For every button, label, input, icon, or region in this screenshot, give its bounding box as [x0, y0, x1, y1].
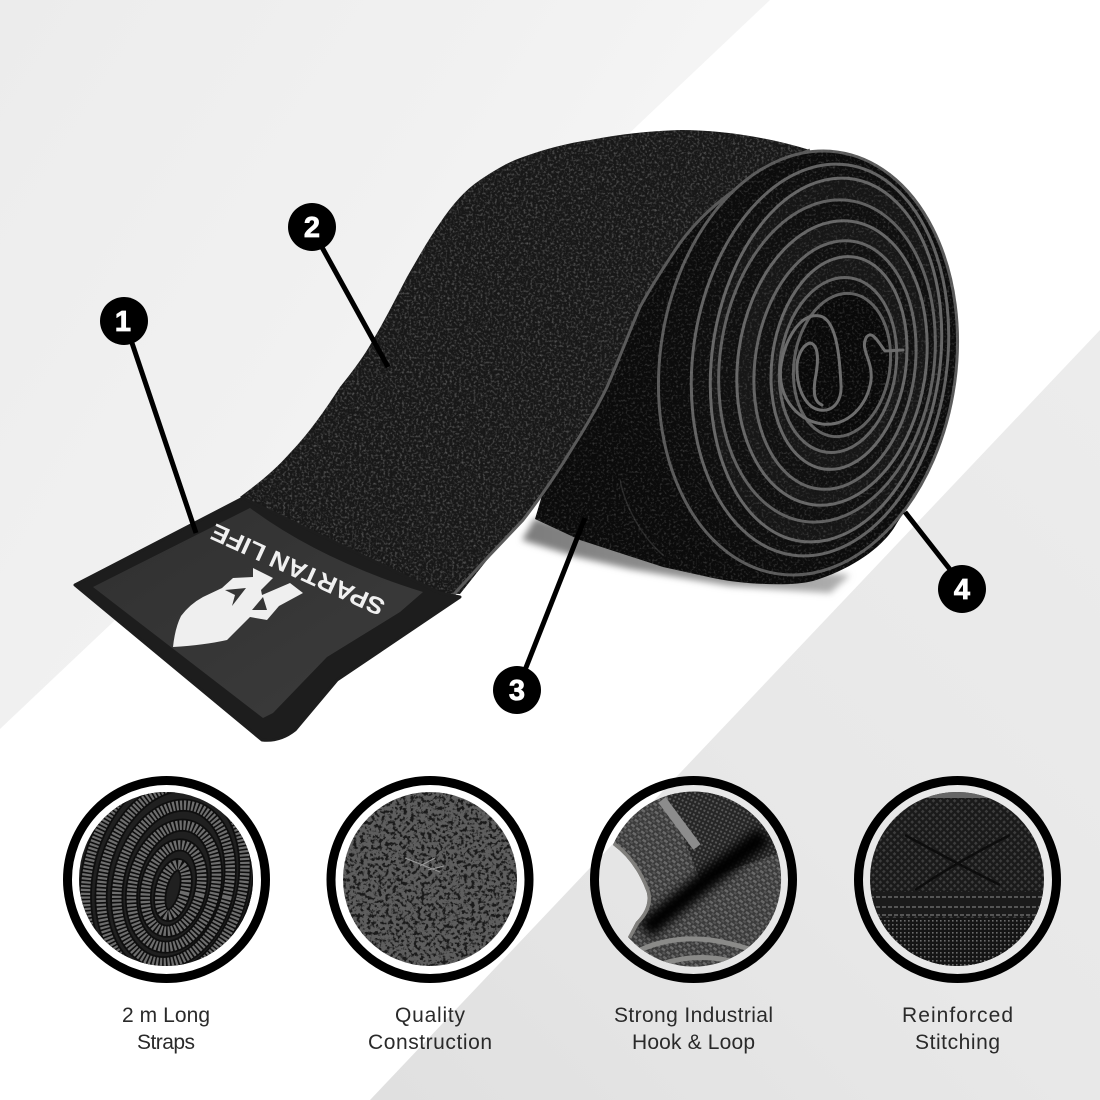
caption: quality construction	[368, 1004, 492, 1054]
strap band	[240, 130, 810, 594]
callout 4: 4	[954, 574, 970, 606]
background: lower-right grey diagonal	[370, 330, 1100, 1100]
caption: strong industrial hook and loop: Strong Industrial	[614, 1004, 773, 1027]
caption: quality construction: Quality	[395, 1004, 466, 1027]
callout 3	[493, 518, 585, 714]
logo: brand name: SPARTAN LIFE	[207, 518, 389, 620]
tab outer edge	[75, 498, 460, 740]
strap seam	[445, 150, 810, 604]
callout 1: 1	[115, 306, 131, 338]
detail circle 3: hook and loop	[594, 780, 792, 978]
rubber label tab	[75, 498, 460, 740]
callout 2	[288, 203, 388, 367]
roll underside and outer silhouette	[535, 133, 957, 584]
product: rolled strap	[240, 130, 984, 604]
ground shadow under the roll	[522, 518, 850, 593]
callout 1	[100, 297, 196, 533]
background: upper-left grey diagonal	[0, 0, 770, 729]
caption: 2 m long straps: Straps	[137, 1031, 195, 1054]
caption: reinforced stitching: Reinforced	[902, 1004, 1013, 1027]
roll end-on spiral	[620, 131, 984, 595]
callout 2: 2	[304, 212, 320, 244]
caption: reinforced stitching	[902, 1004, 1013, 1054]
tab inner panel	[93, 508, 423, 718]
detail circle 2: knit texture	[331, 780, 529, 978]
callout 4	[905, 512, 986, 613]
detail circle 4: reinforced stitching	[858, 780, 1056, 978]
caption: strong industrial hook and loop: Hook & Loop	[632, 1031, 755, 1054]
detail circle 1: coiled strap	[63, 776, 270, 983]
caption: 2 m long straps	[122, 1004, 210, 1054]
callout 3: 3	[509, 675, 525, 707]
logo: helmet	[173, 568, 303, 647]
caption: quality construction: Construction	[368, 1031, 492, 1054]
caption: strong industrial hook and loop	[614, 1004, 773, 1054]
caption: reinforced stitching: Stitching	[915, 1031, 1000, 1054]
caption: 2 m long straps: 2 m Long	[122, 1004, 210, 1027]
